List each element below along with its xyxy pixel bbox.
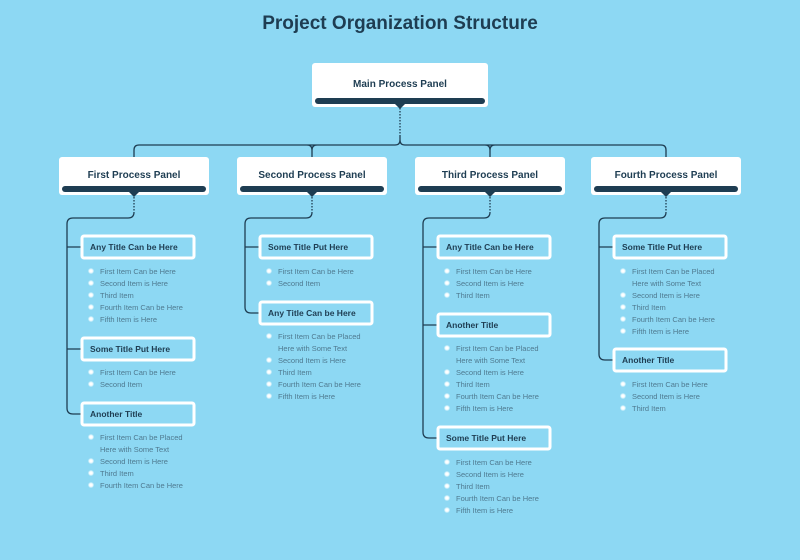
sub box: some title xyxy=(82,338,194,360)
sub box: some title: Some Title Put Here xyxy=(446,433,526,443)
panel: third process: First Item Can be Here xyxy=(456,267,532,276)
panel: second process: Second Process Panel xyxy=(258,170,366,181)
sub box: another title xyxy=(82,403,194,425)
sub box: any title: Any Title Can be Here xyxy=(268,308,356,318)
panel: first process: First Process Panel xyxy=(88,170,181,181)
panel: third process: Here with Some Text xyxy=(456,356,526,365)
sub box: some title: Some Title Put Here xyxy=(268,242,348,252)
panel: fourth process: Third Item xyxy=(632,404,666,413)
panel: first process: First Item Can be Placed xyxy=(100,433,183,442)
panel: third process xyxy=(415,157,565,515)
panel: third process: Third Process Panel xyxy=(442,170,538,181)
panel: third process: Second Item is Here xyxy=(456,368,524,377)
main process panel: Main Process Panel xyxy=(353,79,447,90)
sub box: some title xyxy=(438,427,550,449)
panel: first process: Fourth Item Can be Here xyxy=(100,481,183,490)
panel: second process: Fourth Item Can be Here xyxy=(278,380,361,389)
panel: third process: Third Item xyxy=(456,291,490,300)
panel: second process: Here with Some Text xyxy=(278,344,348,353)
panel: first process: Second Item xyxy=(100,380,142,389)
list xyxy=(89,267,183,324)
sub box: some title xyxy=(614,236,726,258)
panel: fourth process xyxy=(591,157,741,413)
panel: second process: First Item Can be Here xyxy=(278,267,354,276)
panel: fourth process: Fourth Process Panel xyxy=(615,170,718,181)
panel: first process: First Item Can be Here xyxy=(100,368,176,377)
panel: third process: Third Item xyxy=(456,380,490,389)
panel: third process: Fifth Item is Here xyxy=(456,506,513,515)
sub box: any title xyxy=(82,236,194,258)
sub box: any title xyxy=(260,302,372,324)
panel: fourth process: Second Item is Here xyxy=(632,392,700,401)
sub box: some title: Some Title Put Here xyxy=(622,242,702,252)
panel: fourth process: Second Item is Here xyxy=(632,291,700,300)
panel: third process: Fourth Item Can be Here xyxy=(456,494,539,503)
panel: third process: Second Item is Here xyxy=(456,470,524,479)
sub box: another title: Another Title xyxy=(90,409,143,419)
panel: second process: Second Item is Here xyxy=(278,356,346,365)
panel: second process: Fifth Item is Here xyxy=(278,392,335,401)
panel: fourth process: Fifth Item is Here xyxy=(632,327,689,336)
list: Fourth Item Can be Here xyxy=(100,303,183,312)
sub box: another title xyxy=(438,314,550,336)
panel: fourth process: Third Item xyxy=(632,303,666,312)
list: Third Item xyxy=(100,291,134,300)
sub box: any title xyxy=(438,236,550,258)
panel: third process: First Item Can be Here xyxy=(456,458,532,467)
sub box: some title: Some Title Put Here xyxy=(90,344,170,354)
connector: main to panels xyxy=(134,108,666,157)
sub box: another title xyxy=(614,349,726,371)
panel: first process: Third Item xyxy=(100,469,134,478)
panel: second process: First Item Can be Placed xyxy=(278,332,361,341)
sub box: any title: Any Title Can be Here xyxy=(90,242,178,252)
sub box: another title: Another Title xyxy=(446,320,499,330)
panel: first process: Second Item is Here xyxy=(100,457,168,466)
panel: second process: Second Item xyxy=(278,279,320,288)
panel: fourth process: First Item Can be Placed xyxy=(632,267,715,276)
panel: first process: Here with Some Text xyxy=(100,445,170,454)
list: First Item Can be Here xyxy=(100,267,176,276)
panel: second process xyxy=(237,157,387,401)
main process panel xyxy=(312,63,488,109)
panel: first process xyxy=(59,157,209,490)
panel: fourth process: Here with Some Text xyxy=(632,279,702,288)
panel: third process: Second Item is Here xyxy=(456,279,524,288)
panel: fourth process: Fourth Item Can be Here xyxy=(632,315,715,324)
title: Project Organization Structure xyxy=(262,13,538,34)
sub box: some title xyxy=(260,236,372,258)
sub box: any title: Any Title Can be Here xyxy=(446,242,534,252)
panel: third process: Fourth Item Can be Here xyxy=(456,392,539,401)
panel: third process: Fifth Item is Here xyxy=(456,404,513,413)
panel: second process: Third Item xyxy=(278,368,312,377)
panel: third process: First Item Can be Placed xyxy=(456,344,539,353)
list: Fifth Item is Here xyxy=(100,315,157,324)
panel: fourth process: First Item Can be Here xyxy=(632,380,708,389)
panel: third process: Third Item xyxy=(456,482,490,491)
list: Second Item is Here xyxy=(100,279,168,288)
sub box: another title: Another Title xyxy=(622,355,675,365)
